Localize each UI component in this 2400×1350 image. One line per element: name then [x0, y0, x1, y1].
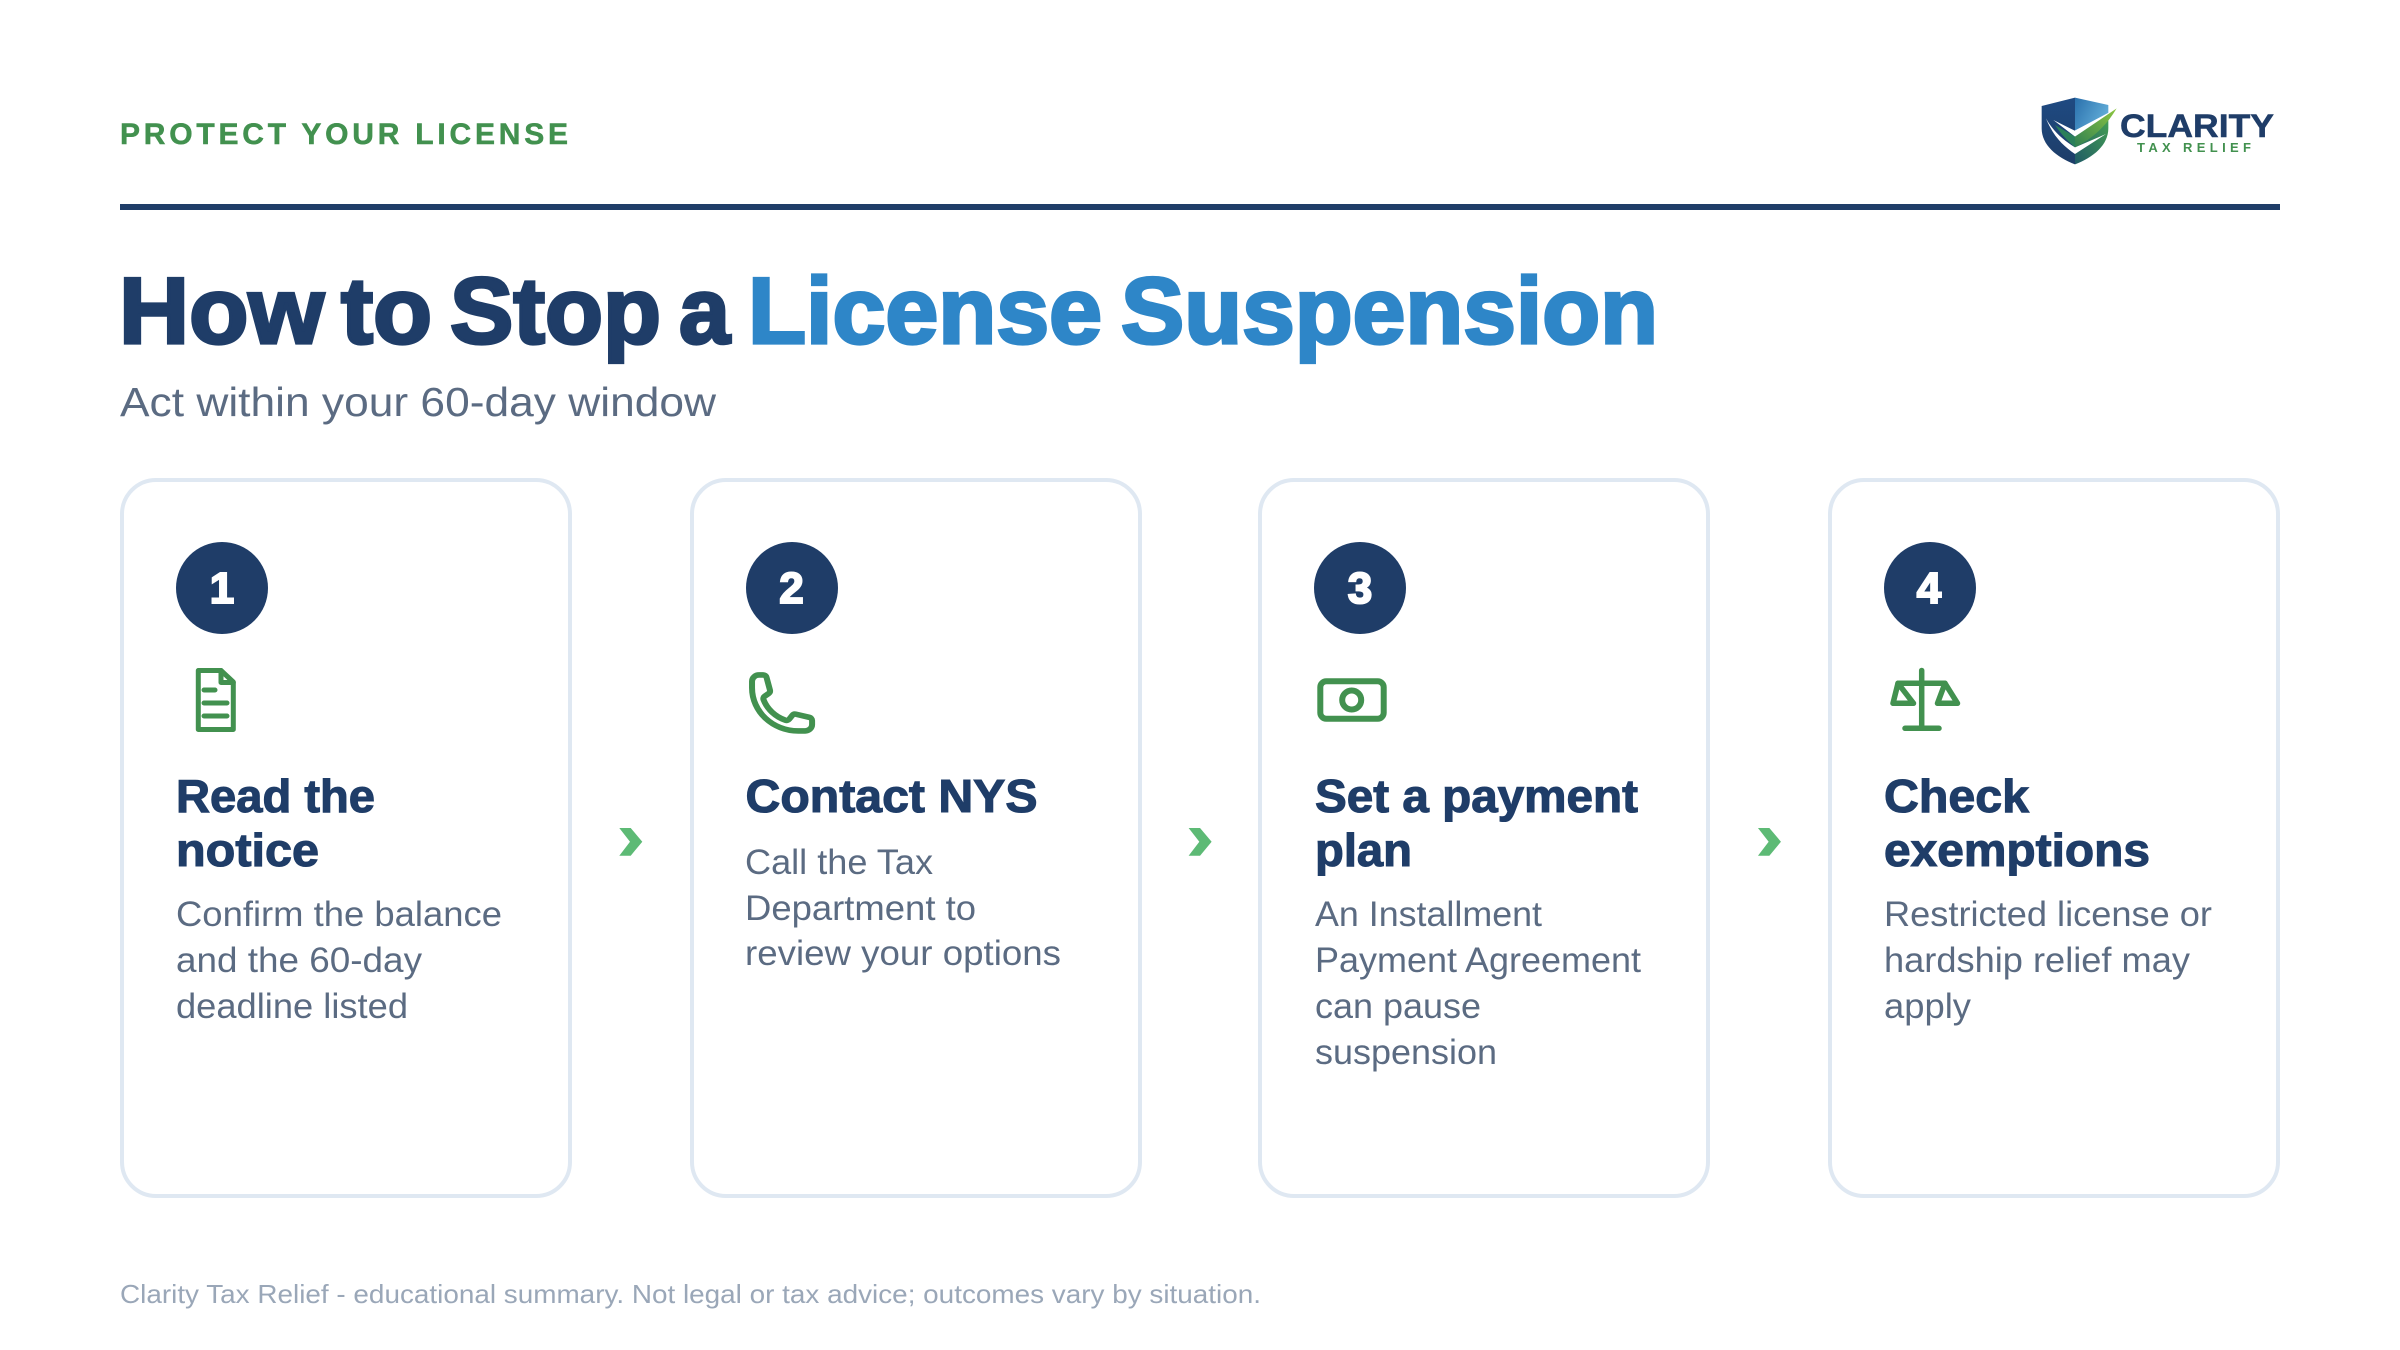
step 1 description: and the 60-day — [176, 941, 423, 980]
card outline — [692, 480, 1140, 1196]
icon: balance scales — [1893, 670, 1958, 728]
logo tagline: TAX RELIEF — [2137, 140, 2251, 155]
title word: a — [679, 258, 731, 363]
step number 1: 1 — [210, 564, 234, 613]
title word: highlight: License — [748, 258, 1102, 363]
panel: step 4 — [1830, 480, 2278, 1196]
icon: shield with check — [2042, 98, 2117, 164]
step 4 heading: exemptions — [1884, 824, 2150, 876]
title word: highlight: Suspension — [1121, 258, 1658, 363]
icon: phone — [752, 675, 812, 731]
card outline — [122, 480, 570, 1196]
header rule — [120, 204, 2280, 210]
icon: money bill — [1320, 681, 1384, 719]
panel: step 3 — [1260, 480, 1708, 1196]
panel: step 2 — [692, 480, 1140, 1196]
title word: How — [119, 258, 325, 363]
step 3 description: An Installment — [1315, 895, 1542, 934]
logo: Clarity Tax Relief — [2042, 98, 2274, 164]
step 4 description: apply — [1884, 987, 1972, 1026]
footer disclaimer: Clarity Tax Relief - educational summary. Not legal or tax advice; outcomes vary by situation. — [120, 1279, 1261, 1309]
step 4 heading — [1884, 770, 2150, 876]
step 1 description — [176, 895, 502, 1026]
title word: to — [341, 258, 432, 363]
arrow 3 — [1758, 828, 1781, 856]
step 3 heading: plan — [1315, 824, 1412, 876]
step number 4 — [1884, 542, 1976, 634]
step 4 description: Restricted license or — [1884, 895, 2212, 934]
step 4 description: hardship relief may — [1884, 941, 2191, 980]
logo wordmark: CLARITY — [2120, 108, 2274, 144]
step 3 description: can pause — [1315, 987, 1481, 1026]
title word: Stop — [450, 258, 661, 363]
step 2 description: Department to — [745, 889, 976, 928]
step 2 description: Call the Tax — [745, 843, 934, 882]
step number 3 — [1314, 542, 1406, 634]
step number 1 — [176, 542, 268, 634]
subtitle: Act within your 60-day window — [120, 379, 716, 425]
card outline — [1260, 480, 1708, 1196]
step 4 heading: Check — [1884, 770, 2029, 822]
step 1 heading: Read the — [176, 770, 375, 822]
step 3 heading — [1315, 770, 1638, 876]
step 1 description: deadline listed — [176, 987, 408, 1026]
step 3 description: Payment Agreement — [1315, 941, 1641, 980]
step 4 description — [1884, 895, 2212, 1026]
step 1 heading — [176, 770, 375, 876]
panel: step 1 — [122, 480, 570, 1196]
step 3 description: suspension — [1315, 1033, 1497, 1072]
step 3 heading: Set a payment — [1315, 770, 1638, 822]
step 2 description: review your options — [745, 934, 1061, 973]
step 2 description — [745, 843, 1061, 973]
step number 4: 4 — [1917, 564, 1942, 613]
step 1 description: Confirm the balance — [176, 895, 502, 934]
title — [119, 258, 1658, 363]
step 2 heading: Contact NYS — [746, 770, 1038, 822]
arrow 2 — [1189, 828, 1212, 856]
arrow 1 — [619, 828, 642, 856]
step number 2: 2 — [779, 564, 804, 613]
eyebrow label: PROTECT YOUR LICENSE — [120, 118, 568, 151]
card outline — [1830, 480, 2278, 1196]
step number 2 — [746, 542, 838, 634]
step 1 heading: notice — [176, 824, 319, 876]
icon: document — [198, 670, 233, 730]
step 3 description — [1315, 895, 1641, 1072]
step number 3: 3 — [1348, 564, 1372, 613]
